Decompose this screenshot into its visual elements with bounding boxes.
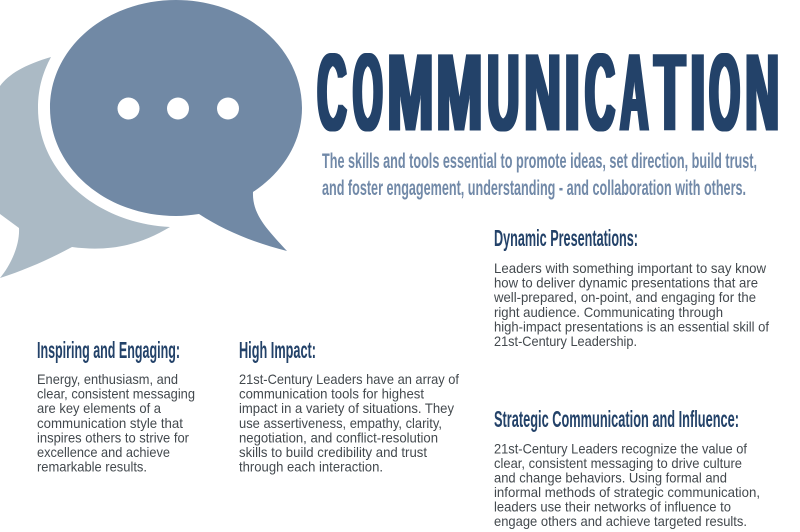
- text block: strategic communication and influence: informal methods of strategic communication,: [494, 485, 760, 500]
- heading: dynamic presentations: Dynamic Presentations:: [494, 225, 638, 251]
- icon: three dots: [118, 98, 239, 120]
- text block: dynamic presentations: right audience. Communicating through: [494, 305, 723, 320]
- text block: inspiring and engaging: clear, consistent messaging: [37, 387, 195, 402]
- subtitle: [322, 149, 757, 200]
- panel: inspiring and engaging: [37, 337, 195, 475]
- title: C: [317, 32, 346, 154]
- heading: inspiring and engaging: Inspiring and Engaging:: [37, 337, 180, 363]
- text block: high impact: impact in a variety of situations. They: [239, 401, 454, 416]
- text block: inspiring and engaging: are key elements of a: [37, 401, 161, 416]
- text block: inspiring and engaging: communication style that: [37, 416, 183, 431]
- text block: strategic communication and influence: leaders use their networks of influence to: [494, 500, 731, 514]
- text block: dynamic presentations: Leaders with something important to say know: [494, 261, 766, 276]
- title: M: [387, 32, 434, 154]
- text block: strategic communication and influence: clear, consistent messaging to drive culture: [494, 456, 742, 471]
- text block: strategic communication and influence: [494, 442, 760, 529]
- text block: dynamic presentations: 21st-Century Leadership.: [494, 334, 637, 349]
- text block: inspiring and engaging: inspires others to strive for: [37, 430, 189, 445]
- text block: high impact: negotiation, and conflict-resolution: [239, 430, 438, 445]
- panel: high impact: [239, 337, 459, 475]
- title: M: [436, 32, 482, 154]
- text block: inspiring and engaging: remarkable results.: [37, 460, 147, 475]
- title: I: [564, 32, 580, 154]
- text block: strategic communication and influence: 21st-Century Leaders recognize the value of: [494, 442, 747, 456]
- icon: back speech bubble: [0, 57, 170, 278]
- text block: inspiring and engaging: Energy, enthusiasm, and: [37, 372, 178, 387]
- title: I: [690, 32, 706, 154]
- text block: inspiring and engaging: excellence and achieve: [37, 445, 170, 460]
- text block: high impact: 21st-Century Leaders have an array of: [239, 372, 459, 387]
- panel: strategic communication and influence: [494, 406, 760, 529]
- text block: dynamic presentations: well-prepared, on-point, and engaging for the: [493, 290, 756, 305]
- text block: dynamic presentations: high-impact presentations is an essential skill of: [494, 319, 769, 334]
- icon: speech bubbles: [0, 0, 302, 278]
- title: A: [620, 32, 648, 154]
- text block: dynamic presentations: how to deliver dynamic presentations that are: [494, 276, 758, 291]
- title: C: [585, 32, 615, 154]
- title: O: [709, 32, 740, 154]
- panel: dynamic presentations: [493, 225, 769, 349]
- title: U: [487, 32, 519, 154]
- text block: high impact: through each interaction.: [239, 460, 383, 475]
- text block: strategic communication and influence: engage others and achieve targeted results.: [494, 514, 747, 529]
- text block: dynamic presentations: [493, 261, 769, 349]
- text block: strategic communication and influence: and change behaviors. Using formal and: [494, 470, 727, 486]
- title: O: [353, 32, 382, 154]
- text block: high impact: communication tools for highest: [239, 387, 424, 402]
- text block: high impact: [239, 372, 459, 475]
- text block: high impact: use assertiveness, empathy, clarity,: [239, 416, 442, 431]
- heading: high impact: High Impact:: [239, 337, 316, 363]
- text block: high impact: skills to build credibility and trust: [239, 445, 427, 460]
- text block: inspiring and engaging: [37, 372, 195, 475]
- title: N: [524, 32, 561, 154]
- icon: front speech bubble: [50, 0, 302, 251]
- title: T: [654, 32, 685, 154]
